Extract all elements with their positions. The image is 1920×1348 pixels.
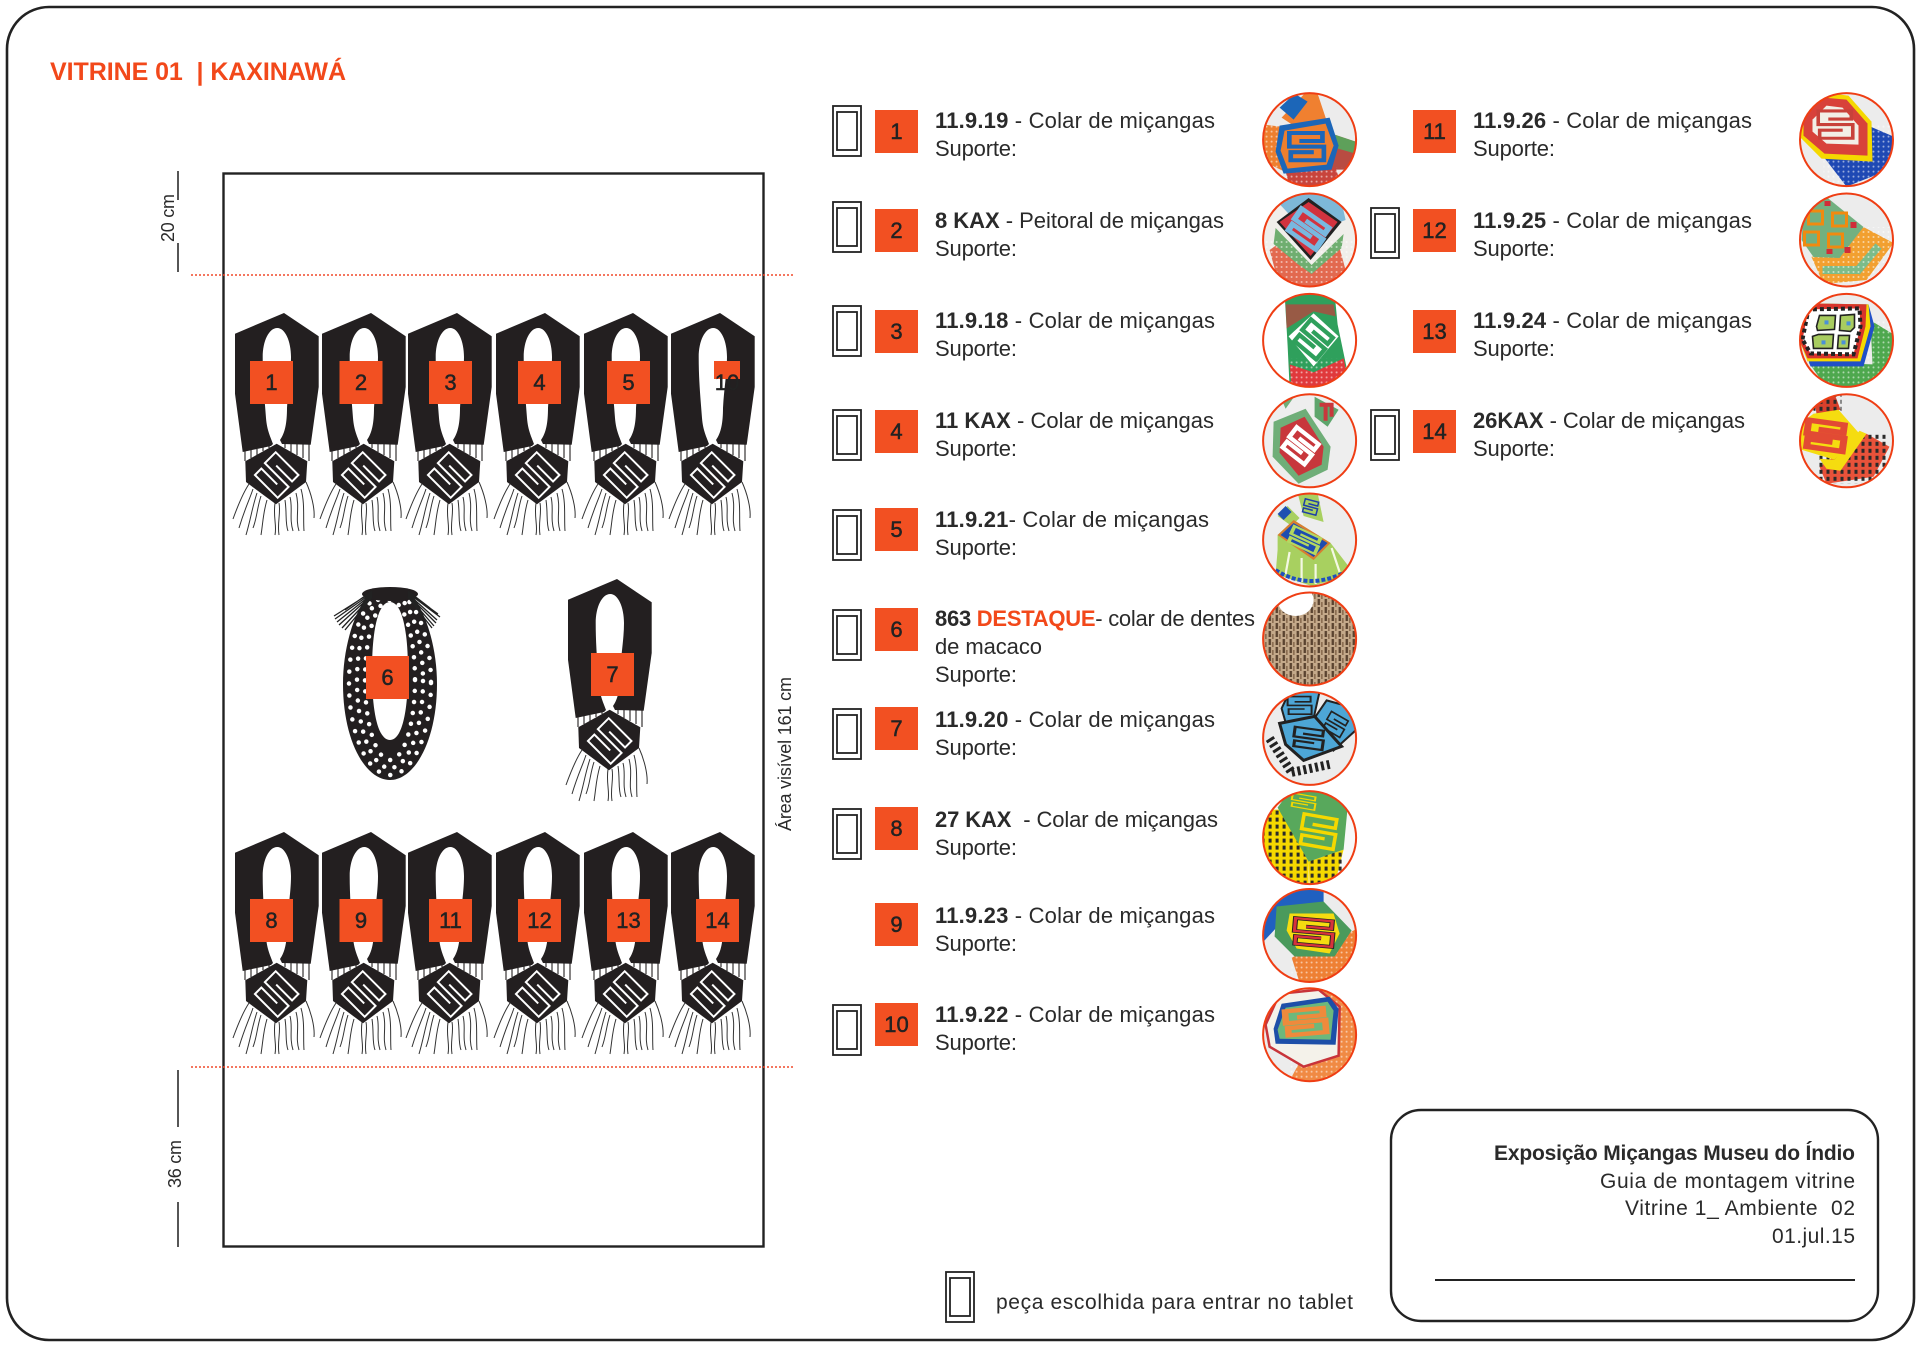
list item 6: 863 DESTAQUE- colar de dentes	[935, 606, 1255, 631]
necklace 13: 13	[616, 908, 641, 933]
necklace 5: 5	[622, 370, 635, 395]
list item 1: 11.9.19 - Colar de miçangas	[935, 108, 1215, 133]
necklace 13	[582, 832, 668, 1054]
photo 6	[1263, 584, 1357, 686]
photo 2	[1263, 193, 1358, 287]
necklace 7: 7	[606, 662, 619, 687]
photo 4	[1263, 394, 1357, 488]
list item 9: 11.9.23 - Colar de miçangas	[935, 903, 1215, 928]
photo 7	[1263, 691, 1357, 785]
list item 8: 27 KAX - Colar de miçangas	[935, 807, 1218, 832]
dimension: visible area: Área visível 161 cm	[775, 677, 795, 831]
list item 8: 8	[890, 816, 903, 841]
list item 11: Suporte:	[1473, 136, 1555, 161]
guide line: Guia de montagem vitrine	[1600, 1170, 1855, 1193]
list item 6: 6	[890, 617, 903, 642]
necklace 14: 14	[705, 908, 730, 933]
necklace 8	[233, 832, 319, 1054]
list item 7	[833, 691, 1357, 785]
bottom dotted line	[191, 1066, 795, 1068]
necklace 4: 4	[533, 370, 546, 395]
photo 5	[1263, 493, 1357, 587]
legend	[946, 1272, 1353, 1322]
list item 14	[1371, 394, 1894, 488]
list item 4: 11 KAX - Colar de miçangas	[935, 408, 1214, 433]
list item 6: de macaco	[935, 634, 1042, 659]
necklace 14	[669, 832, 755, 1054]
photo 11	[1800, 93, 1894, 188]
necklace 6: 6	[381, 665, 394, 690]
list item 7: Suporte:	[935, 735, 1017, 760]
photo 3	[1263, 293, 1357, 388]
list item 7: 11.9.20 - Colar de miçangas	[935, 707, 1215, 732]
necklace 11	[406, 832, 492, 1054]
list item 12: 12	[1422, 218, 1447, 243]
list item 2: Suporte:	[935, 236, 1017, 261]
necklace 7	[566, 579, 652, 801]
necklace 2: 2	[355, 370, 367, 395]
list item 8	[833, 791, 1357, 886]
list item 10: Suporte:	[935, 1030, 1017, 1055]
title: VITRINE 01 | KAXINAWÁ	[50, 57, 346, 86]
list item 13: 13	[1422, 319, 1447, 344]
list item 4: Suporte:	[935, 436, 1017, 461]
necklace 1	[233, 313, 319, 535]
necklace 11: 11	[439, 908, 462, 933]
necklace 12	[494, 832, 580, 1054]
list item 6: Suporte:	[935, 662, 1017, 687]
necklace 12: 12	[527, 908, 552, 933]
list item 2: 2	[890, 218, 903, 243]
list item 11	[1413, 93, 1894, 188]
photo 9	[1263, 888, 1357, 984]
photo 1	[1263, 93, 1357, 188]
necklace 4	[494, 313, 580, 535]
necklace 9: 9	[355, 908, 367, 933]
photo 8	[1263, 791, 1357, 886]
list item 14: 26KAX - Colar de miçangas	[1473, 408, 1745, 433]
list item 12	[1371, 193, 1894, 287]
list item 4	[833, 394, 1357, 488]
list item 11: 11.9.26 - Colar de miçangas	[1473, 108, 1752, 133]
list item 13: 11.9.24 - Colar de miçangas	[1473, 308, 1752, 333]
list item 11: 11	[1423, 119, 1446, 144]
date: 01.jul.15	[1772, 1225, 1855, 1248]
list item 6	[833, 584, 1357, 687]
list item 3: 3	[890, 319, 903, 344]
list item 3	[833, 293, 1357, 388]
necklace 8: 8	[265, 908, 278, 933]
list item 9: Suporte:	[935, 931, 1017, 956]
necklace 2	[320, 313, 406, 535]
list item 4: 4	[890, 419, 903, 444]
list item 9: 9	[890, 912, 903, 937]
dimension: 20 cm	[158, 171, 178, 272]
exhibition title: Exposição Miçangas Museu do Índio	[1494, 1142, 1855, 1165]
list item 2: 8 KAX - Peitoral de miçangas	[935, 208, 1224, 233]
list item 1: Suporte:	[935, 136, 1017, 161]
photo 13	[1800, 293, 1894, 388]
panel: display case	[158, 171, 795, 1247]
list item 3: Suporte:	[935, 336, 1017, 361]
necklace 5	[582, 313, 668, 535]
photo 14	[1800, 394, 1894, 488]
photo 10	[1263, 988, 1357, 1082]
dimension: 20 cm: 20 cm	[158, 194, 178, 242]
list item 13: Suporte:	[1473, 336, 1555, 361]
necklace 3: 3	[444, 370, 457, 395]
list item 5: 5	[890, 517, 903, 542]
list item 12: Suporte:	[1473, 236, 1555, 261]
list item 10	[833, 988, 1357, 1082]
legend: peça escolhida para entrar no tablet	[996, 1291, 1353, 1314]
list item 5	[833, 493, 1357, 587]
necklace 6	[334, 587, 440, 780]
list item 7: 7	[890, 716, 903, 741]
list item 8: Suporte:	[935, 835, 1017, 860]
list item 1: 1	[890, 119, 903, 144]
list item 9	[875, 888, 1357, 984]
list item 12: 11.9.25 - Colar de miçangas	[1473, 208, 1752, 233]
dimension: 36 cm: 36 cm	[165, 1140, 185, 1188]
necklace 10: 10	[715, 370, 739, 395]
list item 3: 11.9.18 - Colar de miçangas	[935, 308, 1215, 333]
list item 10: 10	[884, 1012, 909, 1037]
info box	[1391, 1110, 1878, 1321]
necklace 3	[406, 313, 492, 535]
list item 2	[833, 193, 1358, 287]
necklace 10	[669, 313, 755, 535]
list item 14: 14	[1422, 419, 1447, 444]
list item 1	[833, 93, 1357, 188]
list item 14: Suporte:	[1473, 436, 1555, 461]
list item 5: Suporte:	[935, 535, 1017, 560]
list item 5: 11.9.21- Colar de miçangas	[935, 507, 1209, 532]
list item 13	[1413, 293, 1894, 388]
necklace 1: 1	[265, 370, 278, 395]
list item 10: 11.9.22 - Colar de miçangas	[935, 1002, 1215, 1027]
necklace 9	[320, 832, 406, 1054]
vitrine line: Vitrine 1_ Ambiente 02	[1625, 1197, 1855, 1220]
photo 12	[1800, 193, 1894, 287]
top dotted line	[191, 274, 795, 276]
